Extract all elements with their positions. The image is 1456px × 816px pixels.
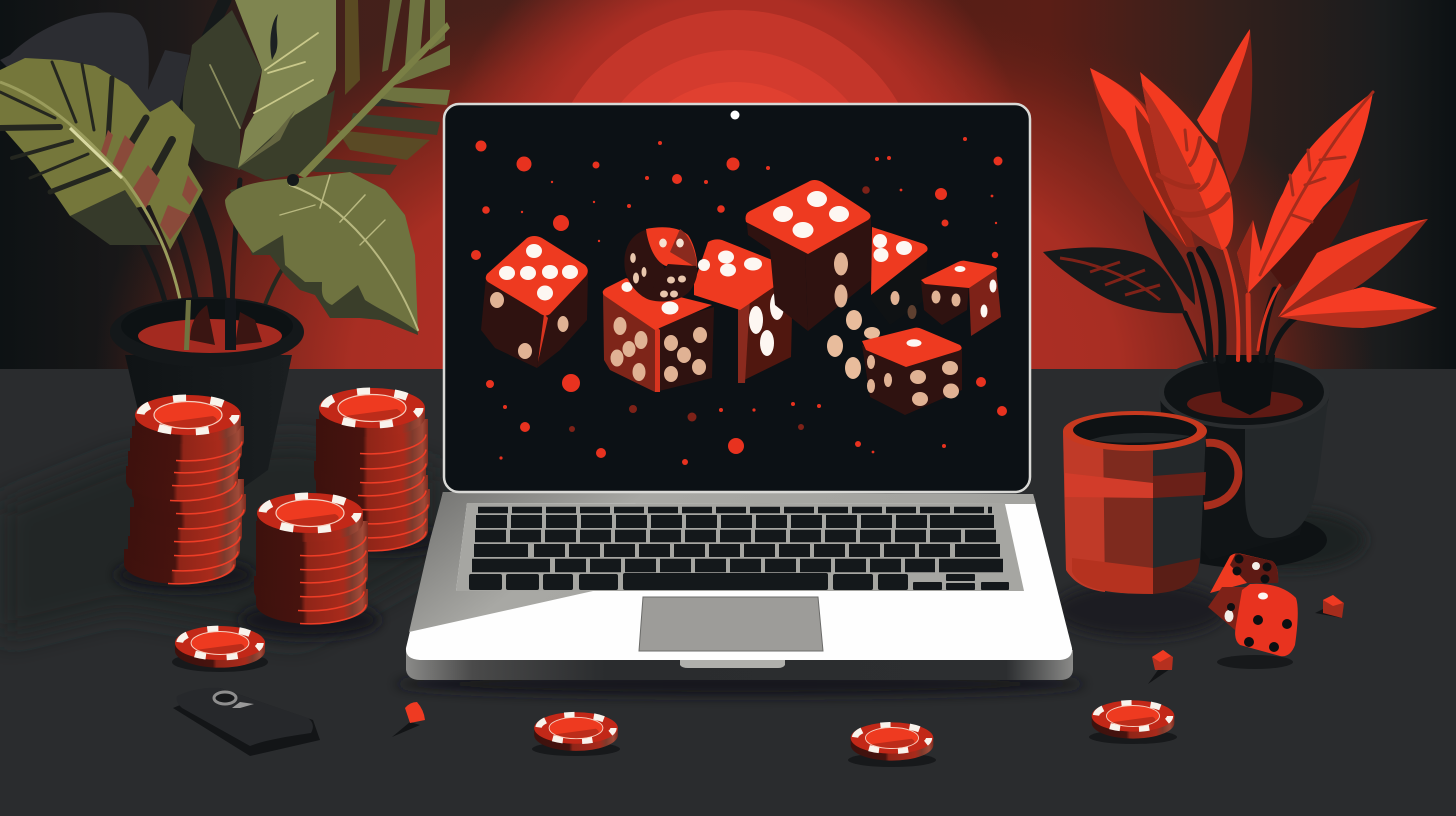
camera (730, 110, 740, 120)
mug (1063, 411, 1238, 594)
centre dark leaf (183, 10, 262, 170)
fan leaf (0, 58, 203, 250)
leaf: far back (1197, 29, 1252, 185)
die 4: large top (746, 180, 871, 331)
lower right leaf shadow (230, 172, 418, 335)
laptop (406, 104, 1073, 680)
leaf: right long (1278, 219, 1428, 317)
keyboard bottom row (469, 573, 1009, 590)
right plant (1043, 29, 1437, 360)
trackpad (639, 597, 823, 651)
screen confetti dots (471, 137, 1007, 465)
deck grey shading (409, 492, 1036, 632)
leaf: right upper (1248, 92, 1373, 293)
mug rim (1063, 411, 1207, 451)
top leaf veins (210, 33, 318, 128)
table surface (0, 369, 1456, 816)
leaf: left big (1090, 68, 1195, 247)
keyboard (456, 503, 1024, 591)
die 6: right (921, 261, 1001, 336)
lower right leaf (225, 172, 418, 332)
laptop base edge (406, 650, 1073, 680)
table shadows (0, 440, 1365, 767)
die 3: centre (694, 239, 793, 383)
leaf: dark back right (1270, 178, 1360, 290)
fan leaf brown strips (100, 130, 198, 240)
loose chip: bottom centre (851, 722, 933, 761)
loose chip: left (175, 626, 265, 668)
chip stack: front (254, 493, 368, 624)
chip stack: back left (124, 395, 246, 584)
front leaf bands (1158, 130, 1228, 215)
right plant stems (1185, 250, 1300, 360)
chip stack: back right (314, 388, 430, 551)
leaf: dark inner (1143, 210, 1195, 305)
fan leaf cuts (0, 62, 172, 192)
leaf: small centre (1237, 220, 1263, 293)
small red die fragment: centre (1148, 650, 1173, 684)
fan leaf lower dark part (70, 190, 160, 245)
right pot (1158, 355, 1330, 568)
small red die fragment: right (1315, 595, 1344, 618)
die 2: stacked (603, 278, 714, 392)
fan rachis (0, 82, 187, 345)
laptop deck (406, 492, 1072, 660)
left pot (110, 297, 304, 490)
lower leaf veins (280, 175, 418, 330)
back grey leaf (0, 12, 190, 150)
mug handle (1204, 443, 1238, 506)
die 1: left (481, 236, 588, 368)
hinge notch (680, 660, 785, 668)
leaf: front big (1140, 72, 1233, 250)
leaf: dark left (1043, 247, 1185, 313)
screen bezel (444, 104, 1030, 492)
small red die fragment: cone (392, 702, 425, 737)
stems (140, 0, 285, 345)
die 7: bottom right (862, 328, 962, 415)
die: small tumbling (624, 227, 697, 302)
top light leaf (235, 0, 336, 168)
right frond on long stalk (298, 0, 450, 178)
small dice on table (1208, 553, 1298, 656)
loose beige pips (827, 310, 880, 379)
front leaf dark side (1142, 85, 1222, 250)
background wall (0, 0, 1456, 500)
phone on table (173, 688, 320, 756)
die 5: back right (871, 227, 928, 325)
keyboard rows (472, 510, 1003, 566)
loose chip: bottom right (1092, 700, 1174, 739)
leaf: right lower (1280, 287, 1437, 328)
loose chip: bottom left (534, 712, 618, 751)
mug body (1063, 431, 1206, 594)
left plant (0, 0, 450, 345)
